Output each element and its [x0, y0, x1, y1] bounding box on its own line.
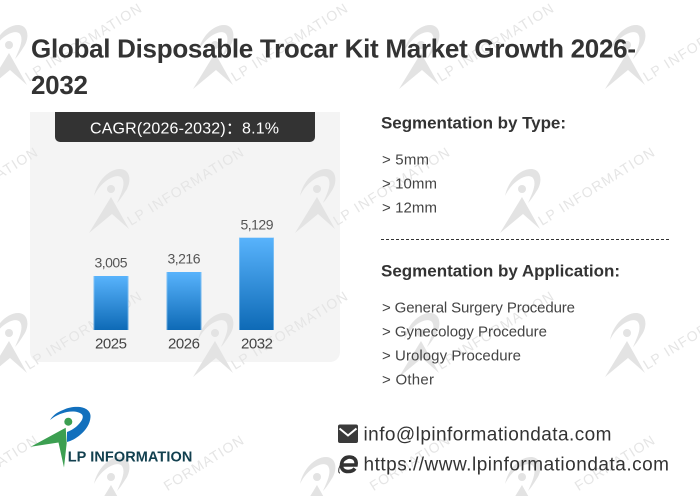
heading: application: Segmentation by Application: [381, 262, 620, 280]
list: applications: > Urology Procedure [382, 348, 521, 364]
list: applications: > Other [382, 372, 434, 388]
icon: envelope [338, 424, 358, 443]
title [31, 34, 636, 100]
contact: email: info@lpinformationdata.com [364, 425, 612, 446]
watermark pattern: LP INFORMATION [434, 288, 556, 373]
bar: 2025: 3,005 [94, 254, 128, 270]
watermark pattern: LP INFORMATION [124, 144, 246, 229]
watermark pattern: LP INFORMATION [434, 0, 556, 85]
bar: 2025: 2025 [95, 335, 127, 352]
watermark pattern: LP INFORMATION [535, 144, 657, 229]
watermark pattern: LP INFORMATION [22, 0, 144, 85]
list: types [382, 152, 437, 216]
logo wordmark: LP INFORMATION [68, 450, 192, 466]
title: Global Disposable Trocar Kit Market Growth 2026- [31, 34, 636, 64]
watermark pattern: FORMATION [161, 432, 246, 494]
list: types: > 5mm [382, 152, 429, 168]
CAGR badge [55, 112, 315, 142]
list: applications: > General Surgery Procedure [382, 300, 575, 316]
bar: 2025 [94, 254, 128, 352]
bar: 2032 [239, 216, 274, 352]
list: applications [382, 300, 575, 388]
panel: segmentation by type [381, 114, 566, 216]
list: types: > 10mm [382, 176, 437, 192]
watermark pattern: LP INFORMATION [228, 0, 350, 85]
icon: blue swoosh [50, 407, 91, 442]
bar: 2032: 2032 [241, 335, 273, 352]
chart panel background [30, 112, 340, 362]
watermark pattern: FORMATION [367, 432, 452, 494]
heading: type: Segmentation by Type: [381, 114, 566, 132]
list: types: > 12mm [382, 200, 437, 216]
title: 2032 [31, 70, 88, 100]
list: applications: > Gynecology Procedure [382, 324, 547, 340]
icon: green figure [31, 418, 72, 468]
logo: LP Information [31, 407, 192, 468]
watermark pattern: LP INFORMATION [22, 288, 144, 373]
CAGR badge: CAGR(2026-2032)：8.1% [90, 120, 279, 138]
watermark pattern: LP INFORMATION [330, 144, 452, 229]
bar chart [94, 216, 274, 352]
panel: segmentation by application [381, 262, 620, 388]
watermark pattern: LP INFORMATION [228, 288, 350, 373]
bar: 2026 [166, 250, 202, 352]
watermark pattern: FORMATION [572, 432, 657, 494]
contact: website: https://www.lpinformationdata.com [364, 455, 669, 476]
bar: 2032: 5,129 [240, 216, 274, 232]
icon: browser e [339, 456, 356, 473]
bar: 2026: 2026 [168, 335, 200, 352]
bar: 2026: 3,216 [168, 250, 201, 266]
